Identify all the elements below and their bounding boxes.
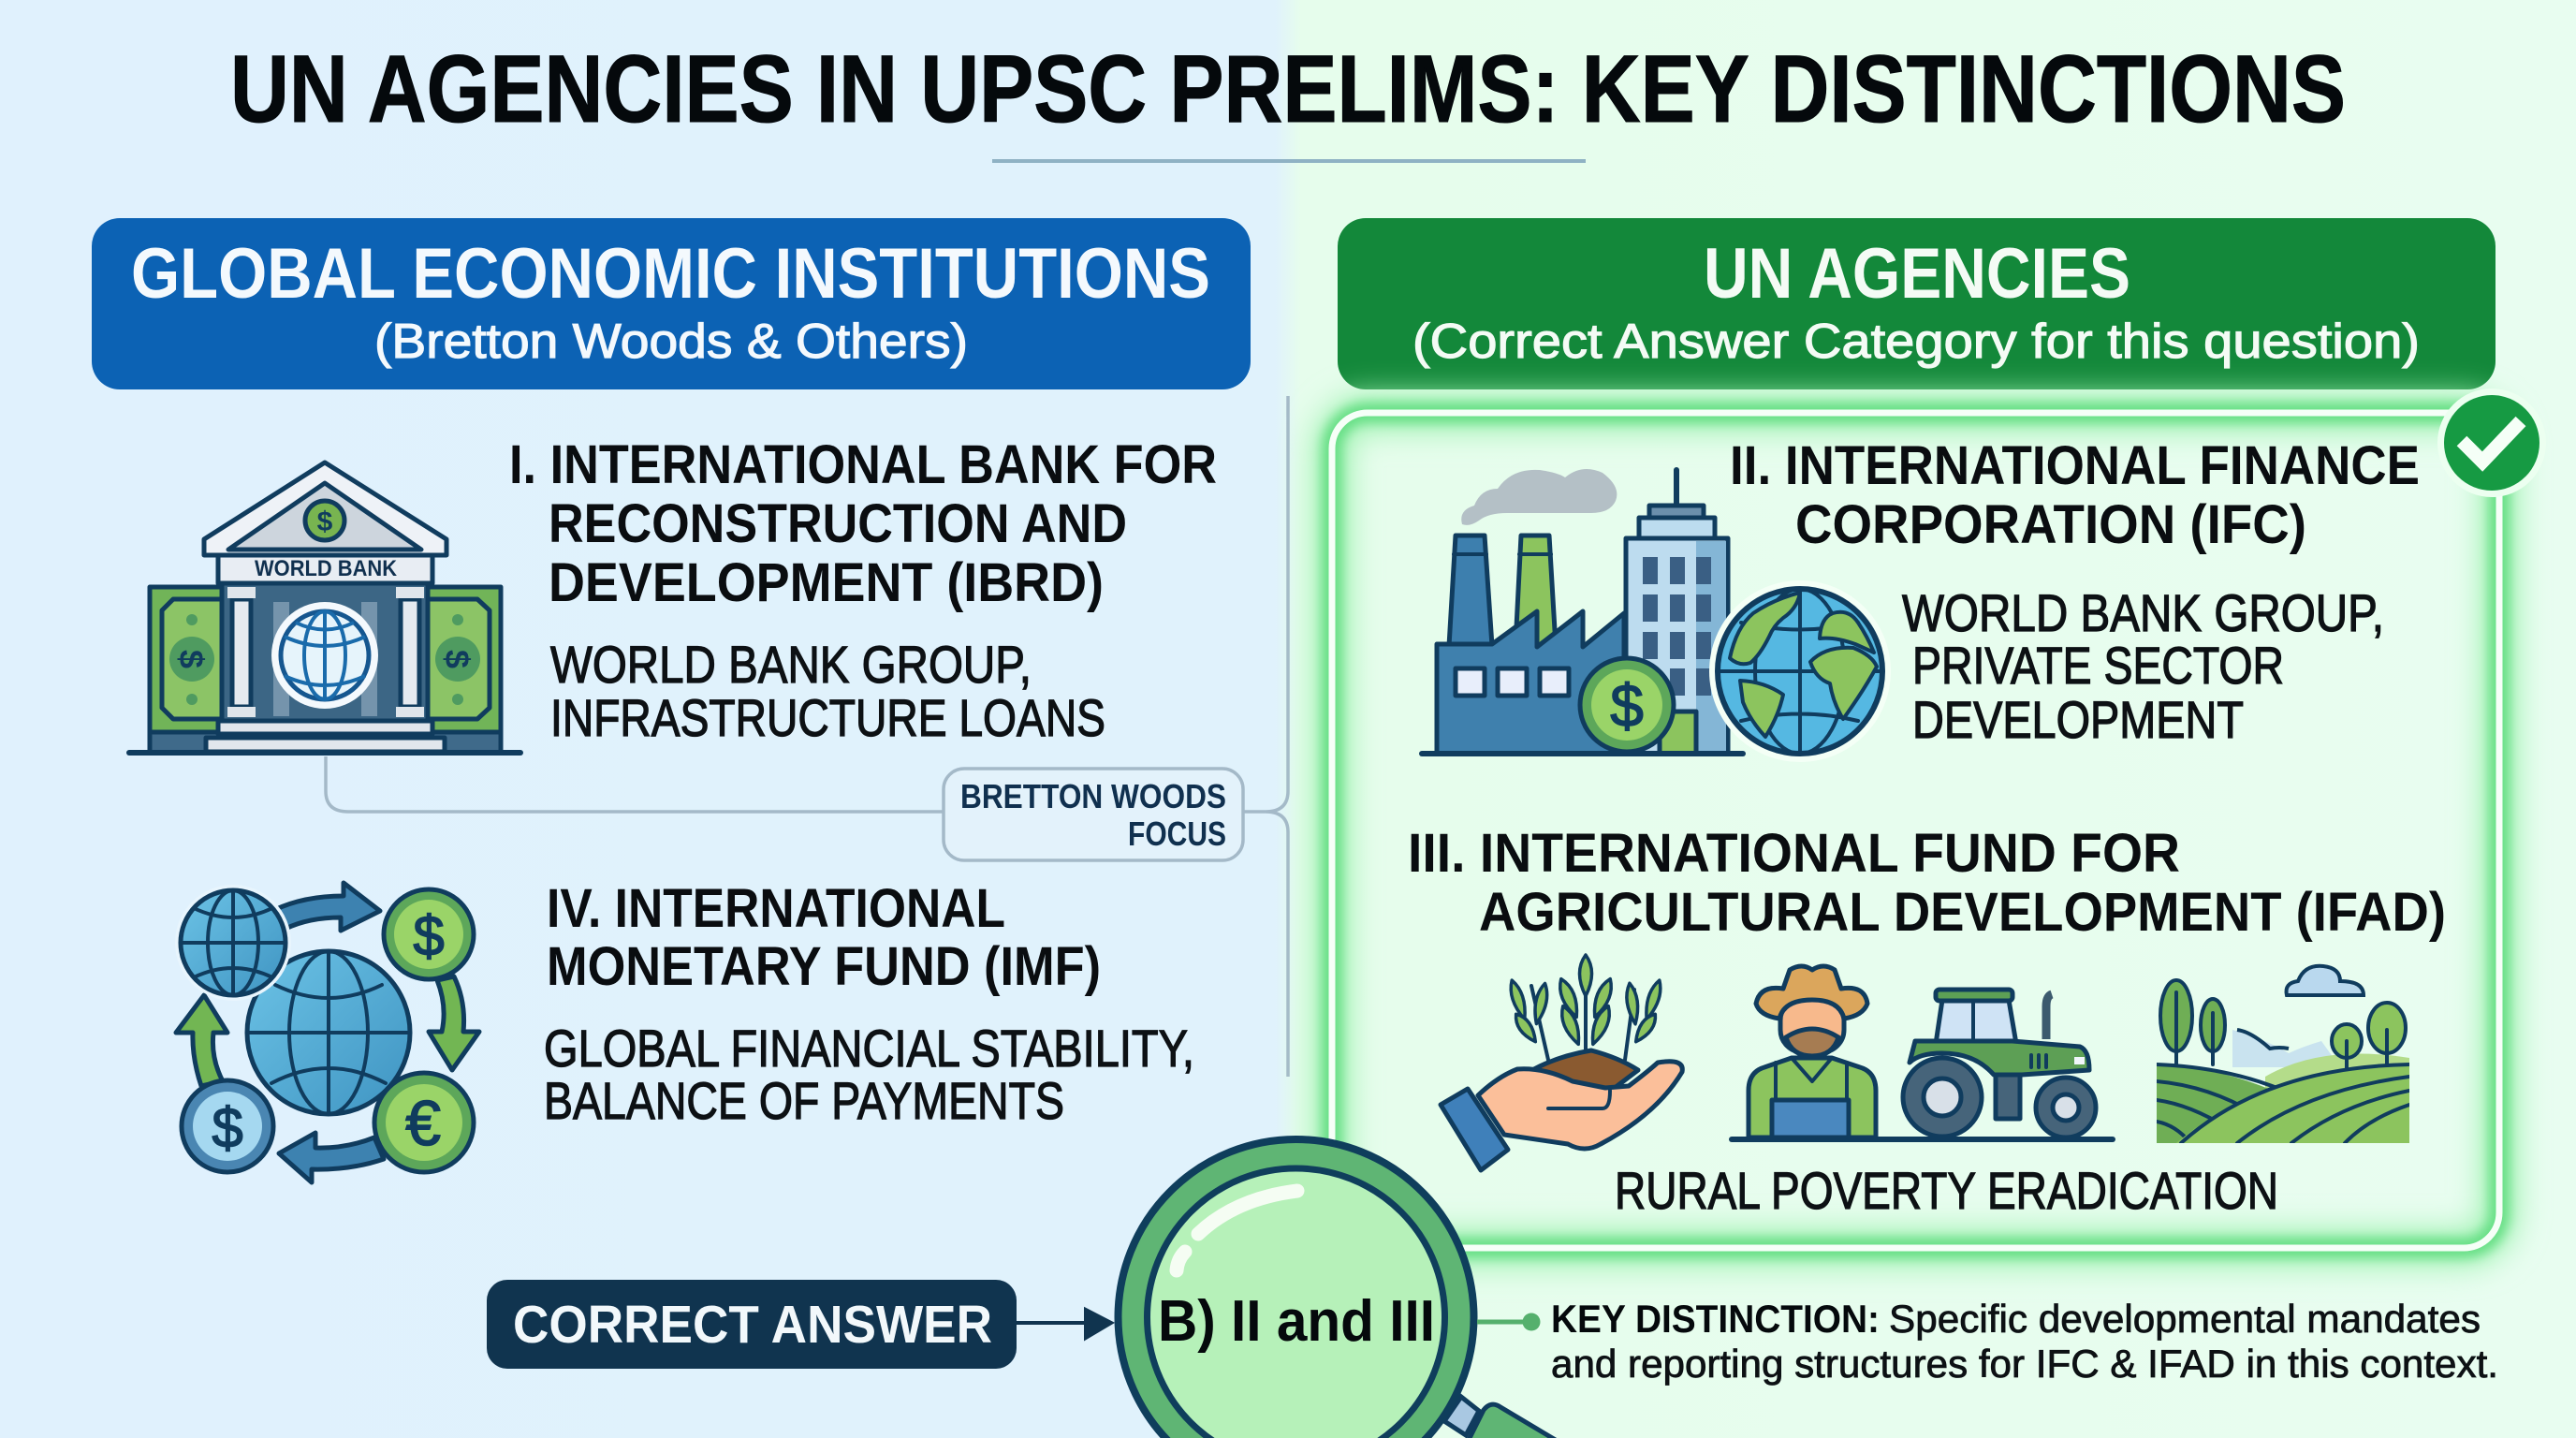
text: IBRD: RECONSTRUCTION AND: [549, 493, 1127, 554]
header: global economic institutions: [92, 218, 1251, 389]
text: IFC: WORLD BANK GROUP,: [1902, 583, 2384, 642]
text: rural poverty eradication: RURAL POVERTY ERADICATION: [1615, 1161, 2278, 1220]
text: IFAD: [1408, 823, 2446, 943]
small globe: [175, 885, 291, 1001]
text: IMF: GLOBAL FINANCIAL STABILITY,: [544, 1019, 1194, 1078]
text: IMF: MONETARY FUND (IMF): [547, 936, 1101, 997]
text: IFAD: III. INTERNATIONAL FUND FOR: [1408, 823, 2180, 884]
text: IBRD: INFRASTRUCTURE LOANS: [550, 688, 1105, 747]
text: IMF: IV. INTERNATIONAL: [547, 878, 1005, 939]
text: IMF: [544, 878, 1194, 1130]
header: UN agencies: (Correct Answer Category for this question): [1412, 315, 2420, 369]
icon: hand holding plants: [1441, 955, 1682, 1170]
text: IFC: CORPORATION (IFC): [1795, 494, 2306, 555]
coin: blue dollar: [182, 1080, 273, 1172]
tower: [1626, 470, 1728, 754]
text: IBRD: WORLD BANK GROUP,: [550, 635, 1032, 694]
icon: left banknote: [162, 599, 225, 719]
coin: euro: [374, 1073, 474, 1172]
bretton woods connector: [326, 396, 1288, 1077]
text: IFC: [1730, 435, 2420, 749]
text: key distinction: and reporting structures for IFC & IFAD in this context.: [1551, 1342, 2498, 1386]
icon: world bank building: [129, 462, 520, 753]
coin: blue dollar: $: [212, 1096, 243, 1159]
header: UN agencies: [1338, 218, 2496, 389]
text: IFC: II. INTERNATIONAL FINANCE: [1730, 435, 2420, 496]
icon: world bank building: $: [317, 506, 333, 537]
text: IBRD: DEVELOPMENT (IBRD): [549, 552, 1104, 613]
arrow: right green: [429, 976, 479, 1070]
text: key distinction: KEY DISTINCTION:: [1551, 1297, 1880, 1341]
icon: right banknote: $: [438, 650, 476, 668]
icon: right banknote: [426, 599, 490, 719]
earth globe: [1709, 580, 1891, 762]
arrow: left green: [176, 995, 227, 1086]
header: UN agencies: UN AGENCIES: [1704, 234, 2130, 314]
label: bretton woods focus: [944, 769, 1243, 860]
coin: euro: €: [405, 1088, 441, 1159]
coin: green dollar: $: [413, 904, 445, 967]
panel: highlighted UN agencies box: [1332, 413, 2499, 1248]
connector: answer to key distinction: [1477, 1313, 1541, 1331]
header: global economic institutions: GLOBAL ECONOMIC INSTITUTIONS: [131, 234, 1210, 314]
pill: correct answer: [487, 1280, 1017, 1369]
icon: farmer: [1749, 966, 1876, 1137]
label: bretton woods focus: FOCUS: [1128, 814, 1226, 853]
icon: check badge: [2437, 389, 2546, 497]
icon: tractor: [1903, 990, 2096, 1137]
main globe: [247, 951, 410, 1114]
text: IFC: DEVELOPMENT: [1912, 690, 2244, 749]
coin: $: [1610, 672, 1644, 740]
icon: left banknote: $: [172, 650, 211, 668]
label: bretton woods focus: BRETTON WOODS: [960, 777, 1226, 815]
pill: correct answer: CORRECT ANSWER: [513, 1295, 992, 1355]
coin: [1580, 658, 1674, 752]
icon: world bank building: WORLD BANK: [255, 556, 398, 581]
text: key distinction: [1551, 1297, 2498, 1386]
icon: IMF globe and currency cycle: [175, 883, 479, 1182]
text: IMF: BALANCE OF PAYMENTS: [544, 1071, 1064, 1130]
icon: farm landscape: [2157, 966, 2409, 1143]
text: IBRD: I. INTERNATIONAL BANK FOR: [509, 434, 1217, 495]
text: IBRD: [509, 434, 1217, 747]
icon: factory, tower, coin and earth: [1422, 469, 1891, 762]
icon: magnifying glass with answer: [1118, 1139, 1559, 1438]
arrow: answer to magnifier: [1017, 1310, 1111, 1338]
text: key distinction: Specific developmental mandates: [1889, 1297, 2481, 1341]
text: IFC: PRIVATE SECTOR: [1912, 636, 2284, 695]
arrow: bottom blue: [279, 1133, 384, 1182]
arrow: top blue: [274, 883, 380, 931]
icon: magnifying glass with answer: B) II and III: [1158, 1289, 1435, 1354]
header: global economic institutions: (Bretton Woods & Others): [374, 315, 968, 369]
coin: green dollar: [384, 889, 474, 979]
smoke cloud: [1461, 469, 1617, 525]
text: IFAD: AGRICULTURAL DEVELOPMENT (IFAD): [1479, 882, 2446, 943]
